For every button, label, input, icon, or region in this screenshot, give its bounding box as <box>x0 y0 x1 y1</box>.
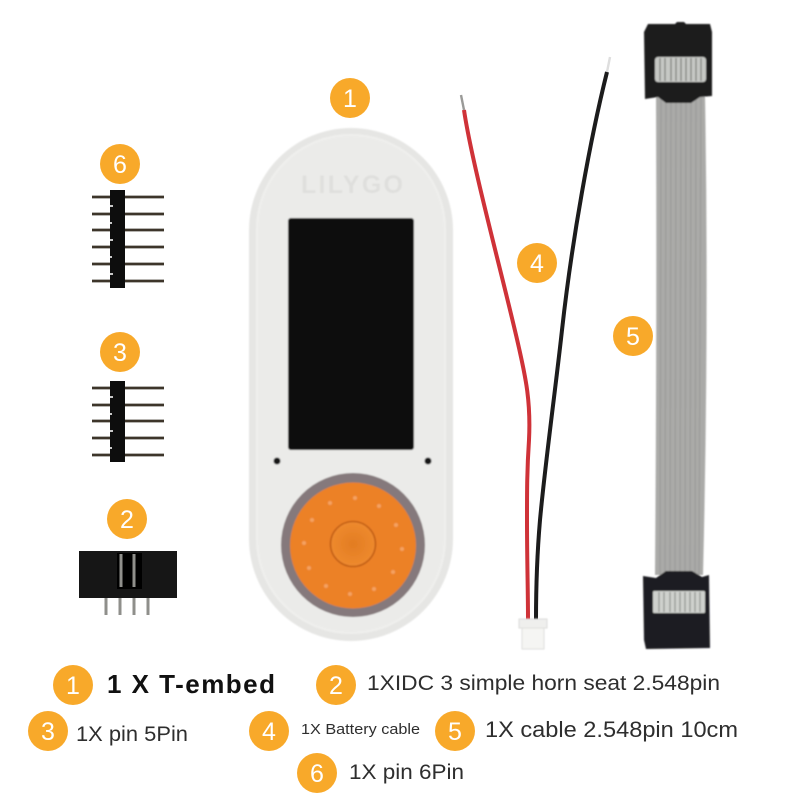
right hole <box>424 458 432 464</box>
red wire <box>461 95 529 620</box>
badge 1 <box>330 78 370 118</box>
ribbon <box>655 95 707 575</box>
legend item 1: 1 <box>66 672 80 700</box>
legend item 1 <box>53 665 275 705</box>
6-pin header <box>92 190 164 288</box>
legend item 6: 1X pin 6Pin <box>349 761 464 784</box>
battery connector <box>519 619 547 649</box>
legend item 3: 1X pin 5Pin <box>76 723 188 746</box>
IDC horn seat <box>79 551 177 615</box>
orange knob <box>290 482 416 608</box>
bottom connector <box>643 571 710 649</box>
screen <box>288 218 414 450</box>
legend <box>28 665 738 793</box>
legend item 4: 4 <box>262 718 276 746</box>
ribbon cable <box>643 22 712 649</box>
badge 6 <box>100 144 140 184</box>
legend item 3 <box>28 711 188 751</box>
legend item 6 <box>297 753 464 793</box>
device body <box>249 128 453 641</box>
brand mark: LILYGO <box>301 171 403 199</box>
legend item 3: 3 <box>41 718 55 746</box>
badge 5: 5 <box>626 323 640 351</box>
badge 5 <box>613 316 653 356</box>
black wire <box>536 57 610 620</box>
legend item 4 <box>249 711 420 751</box>
badge 4 <box>517 243 557 283</box>
legend item 2 <box>316 665 720 705</box>
badge 3: 3 <box>113 339 127 367</box>
badge 6: 6 <box>113 151 127 179</box>
legend item 2: 1XIDC 3 simple horn seat 2.548pin <box>367 672 720 695</box>
knob ring <box>281 473 425 617</box>
device inner face <box>257 135 445 633</box>
legend item 5 <box>435 711 738 751</box>
badge 4: 4 <box>530 250 544 278</box>
badge 2: 2 <box>120 506 134 534</box>
left hole <box>274 458 280 464</box>
legend item 5: 1X cable 2.548pin 10cm <box>485 717 738 742</box>
badge 2 <box>107 499 147 539</box>
5-pin header <box>92 381 164 462</box>
legend item 4: 1X Battery cable <box>301 721 420 738</box>
device: T-embed <box>249 128 453 641</box>
legend item 2: 2 <box>329 672 343 700</box>
legend item 5: 5 <box>448 718 462 746</box>
legend item 1: 1 X T-embed <box>107 669 275 699</box>
top connector <box>644 22 712 103</box>
legend item 6: 6 <box>310 760 324 788</box>
badge 1: 1 <box>343 85 357 113</box>
badge 3 <box>100 332 140 372</box>
